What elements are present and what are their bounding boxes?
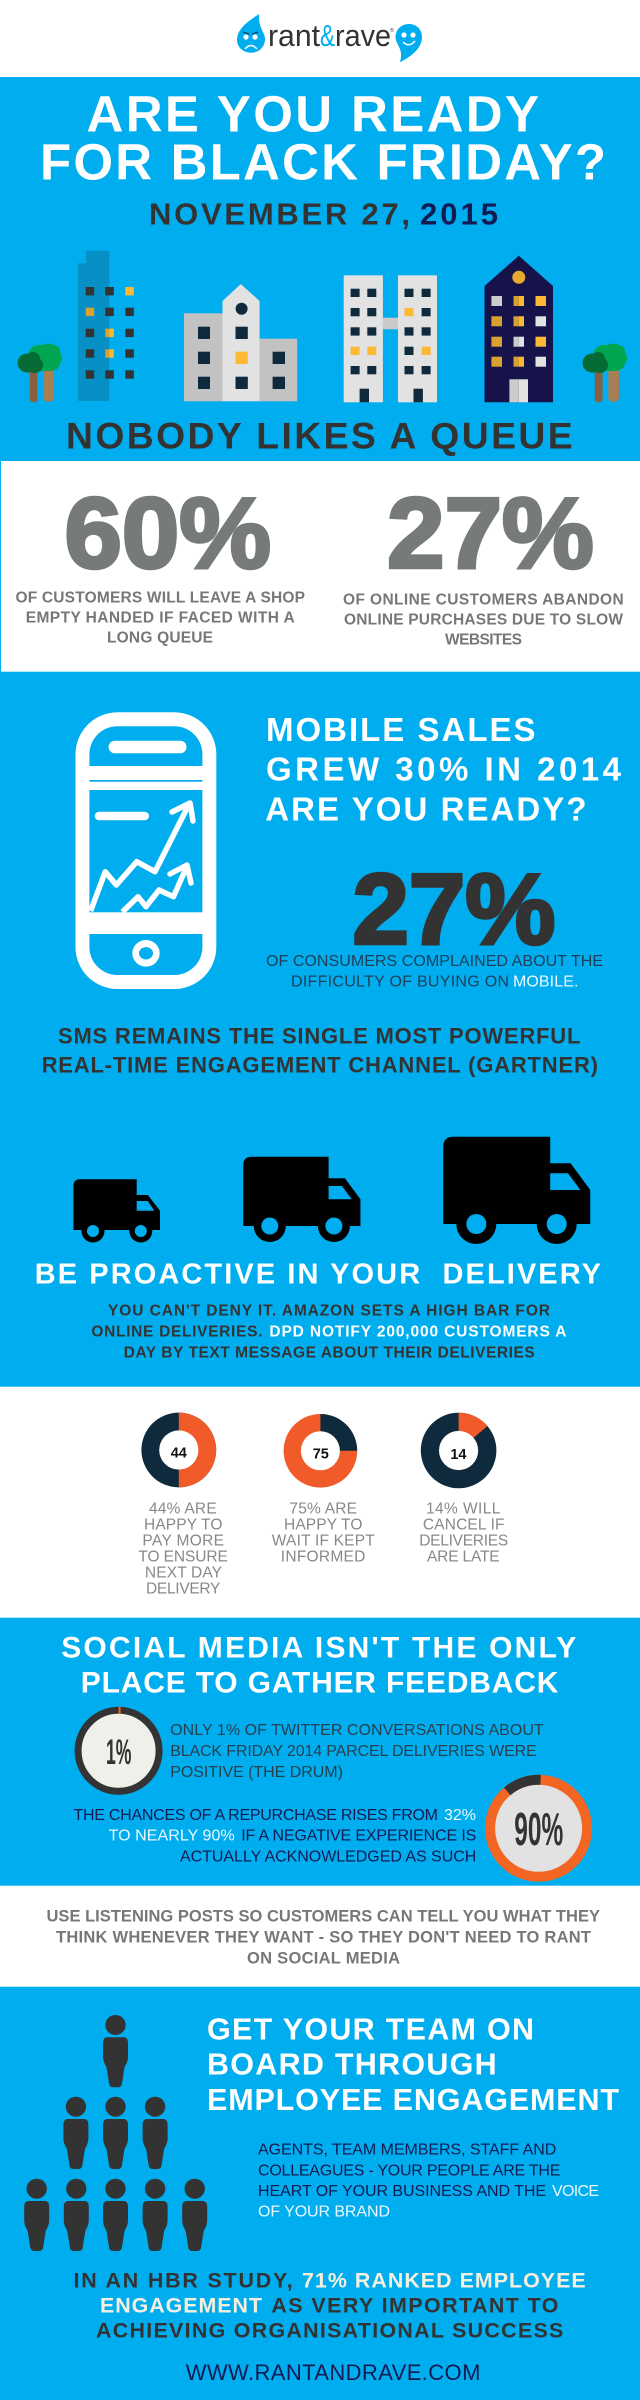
text: hbr study — [74, 2268, 586, 2342]
text: repurchase chances: TO NEARLY 90% — [109, 1828, 235, 1845]
chart: 90 percent ring: 90% — [514, 1803, 563, 1855]
label: 44 percent: HAPPY TO — [144, 1516, 222, 1533]
icon: navy gabled house — [484, 256, 553, 402]
chart: 44 donut: 44 — [171, 1445, 187, 1461]
panel: delivery donuts — [0, 1387, 640, 1618]
text: your people: HEART OF YOUR BUSINESS AND THE — [258, 2183, 546, 2200]
heading: mobile sales: MOBILE SALES — [266, 711, 536, 748]
icon: people pyramid — [24, 2015, 207, 2251]
stat: 60 percent: LONG QUEUE — [107, 630, 213, 647]
logo: rant and rave: & — [320, 18, 335, 53]
text: amazon and dpd: DAY BY TEXT MESSAGE ABOUT THEIR DELIVERIES — [124, 1344, 535, 1361]
label: 75 percent: INFORMED — [281, 1548, 365, 1565]
heading: mobile sales — [265, 711, 622, 828]
text: twitter conversations: ONLY 1% OF TWITTER CONVERSATIONS ABOUT — [170, 1722, 544, 1739]
icon: twin towers — [344, 275, 437, 402]
stat: mobile difficulty: MOBILE. — [513, 974, 578, 991]
date: 2015 — [420, 196, 498, 231]
text: amazon and dpd: DPD NOTIFY 200,000 CUSTOMERS A — [269, 1324, 566, 1341]
label: 14 percent: 14% WILL — [426, 1500, 501, 1517]
icon: grey church building — [184, 284, 297, 401]
title — [40, 86, 606, 190]
text: twitter conversations — [170, 1722, 544, 1781]
text: twitter conversations: BLACK FRIDAY 2014 PARCEL DELIVERIES WERE — [170, 1743, 537, 1760]
text: your people: AGENTS, TEAM MEMBERS, STAFF AND — [258, 2141, 556, 2158]
text: amazon and dpd — [91, 1303, 567, 1361]
stat: 27 percent: ONLINE PURCHASES DUE TO SLOW — [344, 611, 623, 628]
stat: mobile difficulty: 27% — [352, 854, 556, 966]
title: ARE YOU READY — [86, 86, 539, 143]
heading: employee engagement — [207, 2012, 619, 2117]
chart: 44 donut — [141, 1413, 216, 1487]
stat: 27 percent: OF ONLINE CUSTOMERS ABANDON — [343, 591, 624, 608]
text: amazon and dpd: YOU CAN'T DENY IT. AMAZON SETS A HIGH BAR FOR — [108, 1303, 550, 1320]
text: amazon and dpd: ONLINE DELIVERIES. — [91, 1324, 262, 1341]
heading: employee engagement: EMPLOYEE ENGAGEMENT — [207, 2083, 619, 2117]
logo: rant and rave: ® — [390, 27, 394, 34]
icon: teal tower — [78, 251, 134, 401]
heading: mobile sales: ARE YOU READY? — [265, 791, 586, 828]
text: hbr study: 71% RANKED EMPLOYEE — [302, 2268, 586, 2292]
text: repurchase chances: ACTUALLY ACKNOWLEDGED AS SUCH — [180, 1849, 476, 1866]
heading: be proactive: BE PROACTIVE IN YOUR DELIVERY — [35, 1258, 601, 1290]
logo: rant and rave — [237, 14, 422, 62]
stat: mobile difficulty: OF CONSUMERS COMPLAINED ABOUT THE — [266, 953, 603, 970]
label: 75 percent: 75% ARE — [289, 1500, 357, 1517]
text: repurchase chances: IF A NEGATIVE EXPERIENCE IS — [241, 1828, 476, 1845]
text: sms channel: SMS REMAINS THE SINGLE MOST POWERFUL — [58, 1023, 580, 1048]
heading: social media: SOCIAL MEDIA ISN'T THE ONLY — [61, 1631, 576, 1664]
label: 75 percent: WAIT IF KEPT — [272, 1532, 375, 1549]
icon: medium truck — [243, 1157, 360, 1242]
heading: nobody likes a queue: NOBODY LIKES A QUEUE — [66, 414, 573, 456]
panel: queue stats — [1, 461, 640, 672]
label: 44 percent: DELIVERY — [146, 1580, 220, 1597]
icon: small truck — [74, 1179, 160, 1242]
heading: social media — [61, 1631, 576, 1699]
stat: mobile difficulty — [266, 854, 603, 991]
text: sms channel — [42, 1023, 598, 1078]
text: twitter conversations: POSITIVE (THE DRUM) — [170, 1764, 343, 1781]
panel: listening posts: ON SOCIAL MEDIA — [247, 1949, 400, 1967]
panel: listening posts — [0, 1886, 640, 1987]
stat: 27 percent: 27% — [387, 478, 594, 590]
heading: social media: PLACE TO GATHER FEEDBACK — [81, 1666, 559, 1699]
logo: rant and rave: rant — [268, 18, 320, 53]
icon: right trees — [582, 344, 627, 402]
chart: 1 percent ring — [78, 1707, 159, 1791]
text: your people: VOICE — [552, 2183, 599, 2200]
label: 14 percent: CANCEL IF — [423, 1516, 504, 1533]
text: hbr study: ACHIEVING ORGANISATIONAL SUCCESS — [96, 2318, 563, 2342]
panel: logo header — [0, 0, 640, 77]
heading: mobile sales: GREW 30% IN 2014 — [266, 751, 622, 788]
label: 14 percent: DELIVERIES — [419, 1532, 508, 1549]
stat: 60 percent: OF CUSTOMERS WILL LEAVE A SHOP — [16, 590, 305, 607]
icon: left trees — [18, 344, 62, 402]
stat: 60 percent: EMPTY HANDED IF FACED WITH A — [26, 610, 295, 627]
label: 75 percent: HAPPY TO — [284, 1516, 362, 1533]
text: hbr study: ENGAGEMENT — [100, 2293, 262, 2317]
heading: employee engagement: GET YOUR TEAM ON — [207, 2012, 534, 2046]
chart: 90 percent ring — [490, 1780, 587, 1877]
stat: mobile difficulty: DIFFICULTY OF BUYING ON — [291, 974, 509, 991]
text: your people: COLLEAGUES - YOUR PEOPLE ARE THE — [258, 2162, 560, 2179]
label: 14 percent: ARE LATE — [427, 1548, 500, 1565]
chart: 75 donut: 75 — [313, 1446, 329, 1462]
logo: rant and rave: rave — [335, 18, 391, 53]
text: repurchase chances: THE CHANCES OF A REPURCHASE RISES FROM — [74, 1807, 438, 1824]
chart: 75 donut — [284, 1414, 357, 1488]
chart: 14 donut: 14 — [450, 1447, 466, 1463]
text: your people — [258, 2141, 599, 2221]
text: hbr study: AS VERY IMPORTANT TO — [271, 2293, 558, 2317]
panel: listening posts: THINK WHENEVER THEY WANT - SO THEY DON'T NEED TO RANT — [56, 1928, 591, 1946]
text: repurchase chances — [74, 1807, 476, 1866]
chart: 14 donut — [421, 1413, 496, 1488]
icon: large truck — [443, 1137, 590, 1244]
text: repurchase chances: 32% — [444, 1807, 476, 1824]
text: sms channel: REAL-TIME ENGAGEMENT CHANNEL (GARTNER) — [42, 1053, 598, 1078]
title: FOR BLACK FRIDAY? — [40, 133, 606, 190]
label: 44 percent: PAY MORE — [142, 1532, 224, 1549]
label: 44 percent: NEXT DAY — [145, 1564, 222, 1581]
icon: phone with growth chart — [76, 712, 216, 989]
heading: employee engagement: BOARD THROUGH — [207, 2048, 497, 2082]
text: hbr study: IN AN HBR STUDY, — [74, 2268, 293, 2292]
label: 44 percent: 44% ARE — [149, 1500, 217, 1517]
illustration: city skyline — [18, 251, 627, 402]
panel: listening posts: USE LISTENING POSTS SO CUSTOMERS CAN TELL YOU WHAT THEY — [46, 1908, 600, 1926]
label: 14 percent — [419, 1500, 508, 1565]
date: NOVEMBER 27, — [149, 196, 410, 231]
stat: 27 percent — [343, 478, 624, 648]
label: 75 percent — [272, 1500, 375, 1565]
chart: 1 percent ring: 1% — [106, 1733, 131, 1772]
stat: 60 percent: 60% — [64, 478, 271, 590]
label: 44 percent: TO ENSURE — [138, 1548, 228, 1565]
footer url: WWW.RANTANDRAVE.COM — [186, 2360, 480, 2385]
text: your people: OF YOUR BRAND — [258, 2204, 390, 2221]
stat: 60 percent — [16, 478, 305, 647]
stat: 27 percent: WEBSITES — [445, 631, 522, 648]
label: 44 percent — [138, 1500, 228, 1597]
